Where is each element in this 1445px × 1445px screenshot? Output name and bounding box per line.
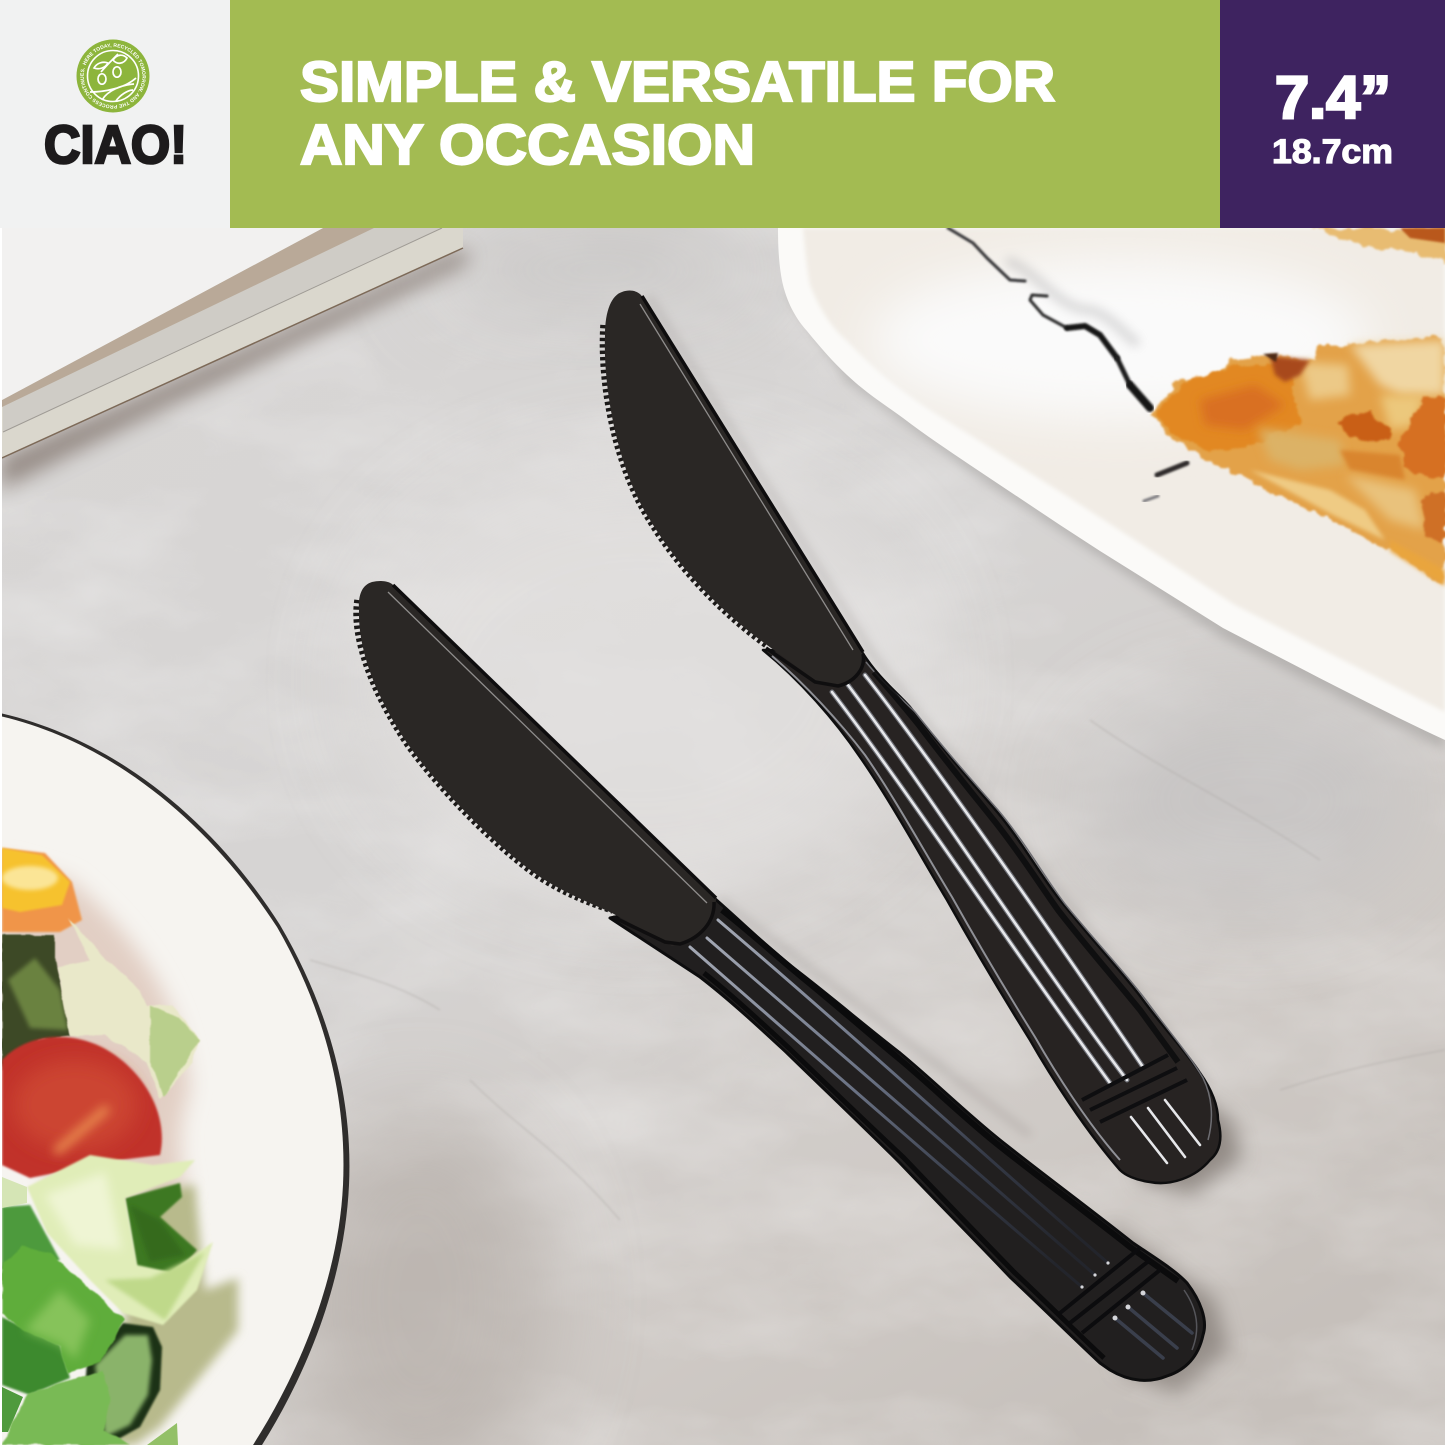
title: ANY OCCASION	[300, 113, 755, 177]
lemon slice	[2, 848, 82, 932]
serrated edge	[603, 325, 767, 645]
serrated edge	[357, 600, 613, 910]
dark lettuce	[2, 935, 70, 1070]
title: SIMPLE & VERSATILE FOR	[300, 50, 1055, 114]
dark green lettuce	[125, 1183, 197, 1274]
darker lower lettuce	[2, 1317, 70, 1395]
plate marble veins	[948, 228, 1187, 501]
handle rim highlights	[772, 656, 1211, 1160]
upper knife	[603, 291, 1220, 1183]
salad shadow	[0, 860, 238, 1445]
spine highlight	[388, 592, 707, 903]
salad plate	[0, 713, 349, 1445]
logo emblem	[76, 40, 150, 112]
handle end ridges	[1115, 1293, 1192, 1358]
tomato	[2, 1037, 162, 1178]
size panel	[1220, 0, 1445, 228]
pale lettuce leaf	[57, 918, 200, 1100]
bottom lettuce	[2, 1370, 178, 1445]
handle	[763, 650, 1220, 1183]
book with shadow	[0, 228, 470, 490]
handle ridges	[690, 920, 1108, 1287]
title	[300, 50, 1055, 177]
bright green lettuce	[2, 1247, 125, 1373]
bolster	[613, 902, 714, 944]
cucumber	[80, 1323, 162, 1445]
handle ridges	[832, 675, 1200, 1163]
top pizza slice	[1310, 228, 1445, 262]
bolster	[766, 648, 863, 686]
knife shadows	[648, 296, 1242, 1392]
cross ridges	[1060, 1248, 1160, 1333]
spine highlight	[640, 304, 853, 650]
emblem ring text: HERE TODAY, RECYCLED TOMORROW. AND THE PROCESS CONTINUES.	[80, 43, 146, 109]
pale romaine leaf	[2, 1155, 213, 1325]
lower knife	[357, 581, 1205, 1380]
pizza slice	[1152, 336, 1445, 586]
cross ridges	[1082, 1055, 1187, 1122]
handle	[610, 897, 1205, 1380]
heading banner	[230, 0, 1220, 228]
emblem olives	[90, 54, 136, 101]
mid green lettuce	[2, 1205, 60, 1270]
size in centimetres: 18.7cm	[1272, 133, 1393, 171]
blade	[605, 291, 863, 685]
serving plate: white marble	[778, 228, 1445, 750]
logo panel	[0, 0, 230, 228]
size in inches: 7.4”	[1275, 64, 1391, 131]
logo wordmark: CIAO!	[44, 115, 187, 175]
blade	[359, 581, 716, 946]
ridge glints	[1080, 1261, 1146, 1320]
handle rim shading	[704, 910, 1197, 1358]
